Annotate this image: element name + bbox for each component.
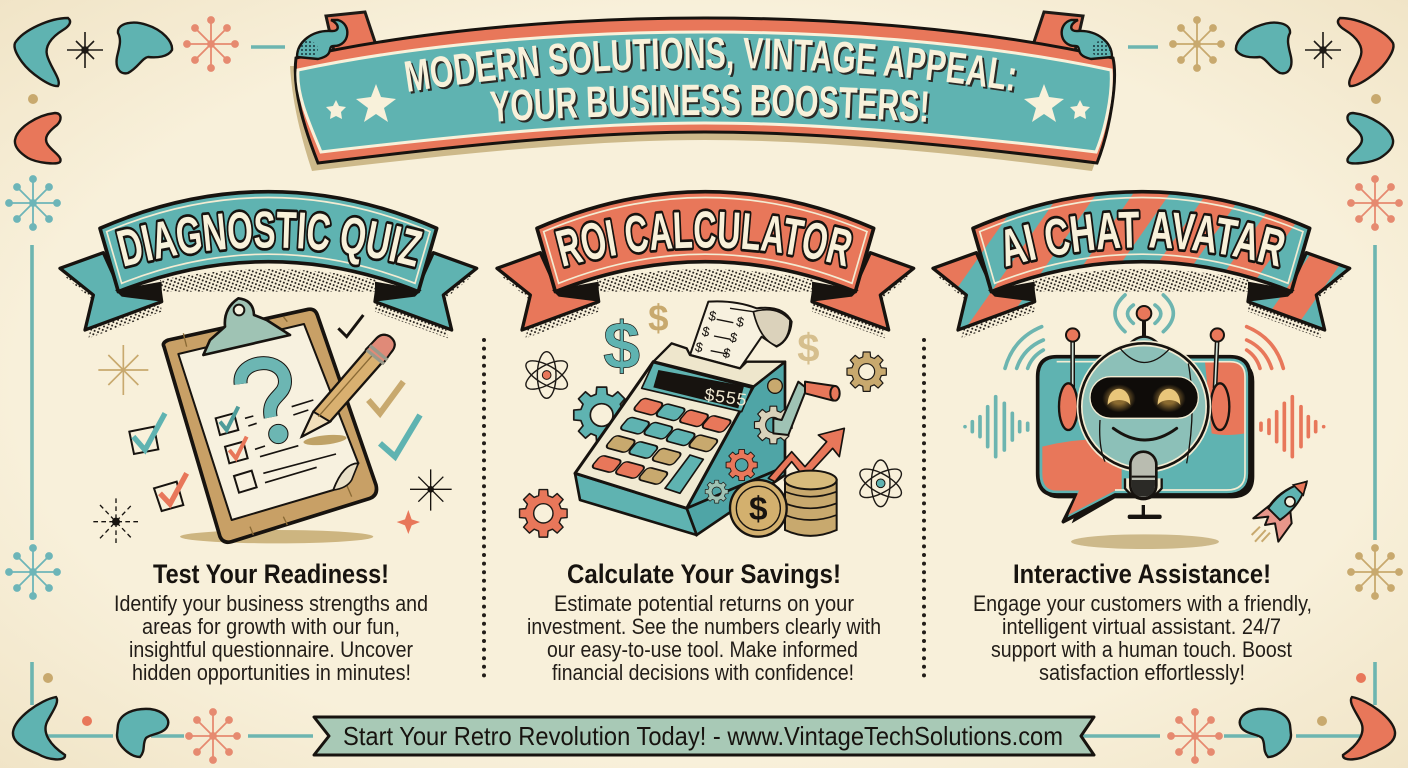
- divider: [482, 340, 486, 680]
- text: calculate your savings: financial decisions with confidence!: [552, 660, 854, 685]
- panel: diagnostic quiz: [58, 190, 478, 685]
- text: test your readiness: Test Your Readiness!: [153, 559, 389, 589]
- title banner: [290, 10, 1116, 171]
- icon: clipboard with question mark: [163, 298, 395, 543]
- title text: [404, 37, 1017, 124]
- text: interactive assistance: intelligent virtual assistant. 24/7: [1002, 614, 1281, 639]
- title text: MODERN SOLUTIONS, VINTAGE APPEAL:: [404, 37, 1017, 94]
- icon: retro calculator with receipt, coins and arrow: $: [728, 329, 739, 346]
- icon: retro calculator with receipt, coins and arrow: $: [701, 324, 712, 340]
- icons: checkmarks and sparkles around clipboard: [93, 315, 452, 545]
- ribbon: ai chat avatar: AI CHAT AVATAR: [1003, 208, 1286, 270]
- panel: ai chat avatar: [931, 190, 1352, 685]
- icon: rocket: [1252, 482, 1307, 542]
- ribbon: diagnostic quiz: DIAGNOSTIC QUIZ: [114, 208, 424, 270]
- divider: [922, 340, 926, 680]
- ribbon: ai chat avatar: [931, 190, 1352, 338]
- panel: roi calculator: [495, 190, 916, 685]
- text: interactive assistance: Interactive Assistance!: [1013, 559, 1271, 589]
- text: test your readiness: insightful questionnaire. Uncover: [129, 637, 413, 662]
- text: test your readiness: Identify your business strengths and: [114, 591, 428, 616]
- icon: retro calculator with receipt, coins and arrow: $: [722, 345, 733, 361]
- icon: retro calculator with receipt, coins and arrow: $: [707, 308, 718, 324]
- icon: retro calculator with receipt, coins and arrow: $: [749, 491, 768, 528]
- icon: retro calculator with receipt, coins and arrow: $: [648, 298, 669, 339]
- text: interactive assistance: support with a human touch. Boost: [991, 637, 1292, 662]
- icons: radio waves and sound bars: [965, 295, 1324, 457]
- text: calculate your savings: Estimate potential returns on your: [554, 591, 854, 616]
- footer banner: Start Your Retro Revolution Today! - www.VintageTechSolutions.com: [343, 721, 1063, 751]
- ribbon: diagnostic quiz: [58, 190, 478, 338]
- text: interactive assistance: Engage your customers with a friendly,: [973, 591, 1312, 616]
- ribbon: roi calculator: [495, 190, 916, 338]
- icon: retro calculator with receipt, coins and arrow: [520, 298, 906, 537]
- text: calculate your savings: investment. See the numbers clearly with: [527, 614, 881, 639]
- icon: retro calculator with receipt, coins and arrow: $: [694, 339, 705, 356]
- text: calculate your savings: [527, 559, 881, 685]
- text: test your readiness: areas for growth with our fun,: [142, 614, 400, 639]
- text: interactive assistance: [973, 559, 1312, 685]
- text: calculate your savings: Calculate Your Savings!: [567, 559, 841, 589]
- icon: retro calculator with receipt, coins and arrow: $: [603, 309, 640, 383]
- text: test your readiness: hidden opportunities in minutes!: [132, 660, 411, 685]
- text: test your readiness: [114, 559, 428, 685]
- ribbon: roi calculator: ROI CALCULATOR: [554, 208, 854, 270]
- text: calculate your savings: our easy-to-use tool. Make informed: [547, 637, 858, 662]
- title text: YOUR BUSINESS BOOSTERS!: [490, 84, 930, 124]
- text: interactive assistance: satisfaction effortlessly!: [1039, 660, 1245, 685]
- icon: retro calculator with receipt, coins and arrow: $555: [702, 386, 748, 412]
- icon: robot avatar in speech bubble: [1038, 306, 1254, 549]
- icon: retro calculator with receipt, coins and arrow: $: [797, 327, 819, 371]
- icon: retro calculator with receipt, coins and arrow: $: [735, 314, 746, 330]
